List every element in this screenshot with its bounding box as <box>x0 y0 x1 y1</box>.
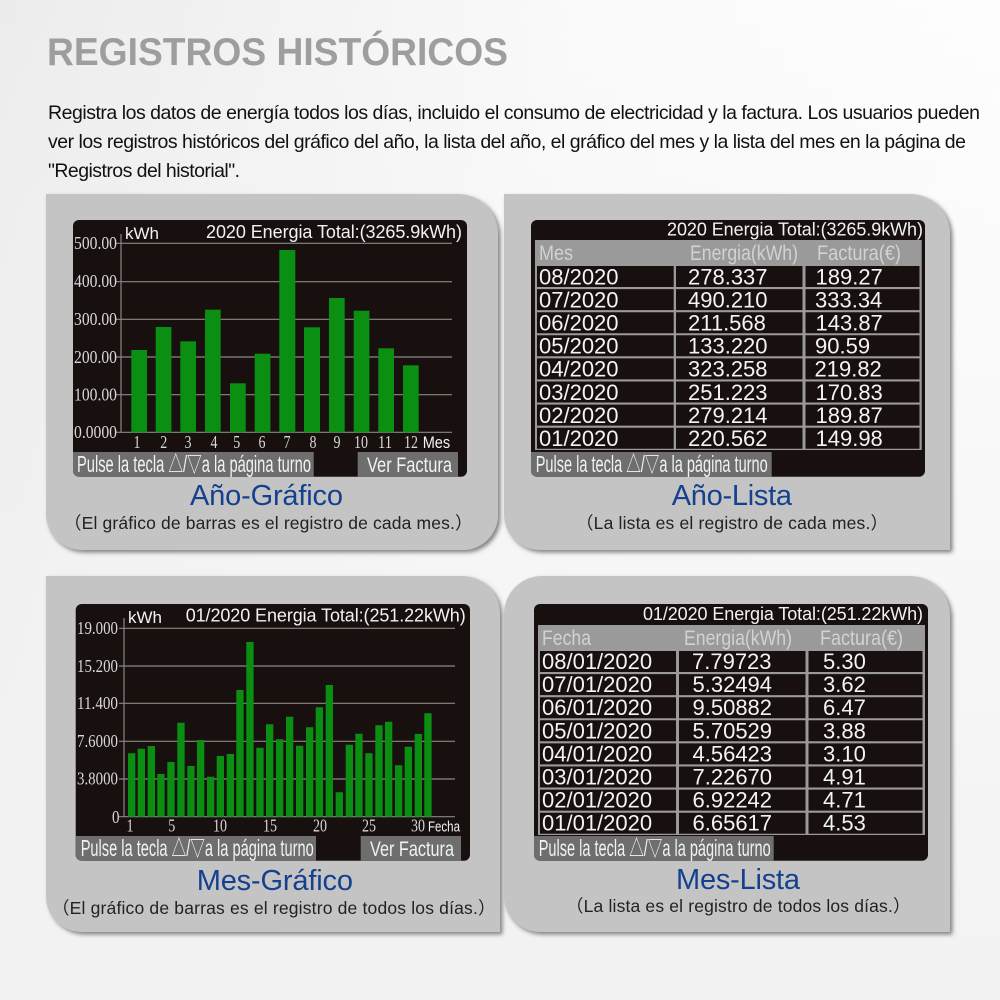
table rows: 4.53 <box>823 811 866 836</box>
intro paragraph: Registra los datos de energía todos los días, incluido el consumo de electricidad y la factura. Los usuarios pueden <box>48 102 980 124</box>
y axis labels: 400.00 <box>74 271 117 291</box>
page-turn button <box>534 835 774 861</box>
table rows: 08/01/2020 <box>542 649 652 674</box>
table rows: 143.87 <box>816 310 883 336</box>
x axis labels: 30 <box>411 816 425 836</box>
table rows: 05/2020 <box>539 334 619 359</box>
screen: year bar chart <box>73 220 467 477</box>
table rows: 5.30 <box>823 649 866 674</box>
y axis labels: 0.0000 <box>74 422 117 442</box>
table rows: 05/01/2020 <box>542 718 652 743</box>
table rows: 03/2020 <box>539 380 619 405</box>
panel caption: （La lista es el registro de todos los días.） <box>566 896 910 916</box>
x axis labels: 9 <box>334 432 340 452</box>
y axis labels: 3.8000 <box>77 769 118 789</box>
table rows: 4.56423 <box>692 741 772 766</box>
table rows <box>540 649 922 836</box>
chart title: 01/2020 Energia Total:(251.22kWh) <box>186 606 466 626</box>
x axis labels: 6 <box>258 432 266 452</box>
table rows: 7.79723 <box>692 649 772 674</box>
panel caption: （El gráfico de barras es el registro de cada mes.） <box>64 513 472 533</box>
list title: 2020 Energia Total:(3265.9kWh) <box>667 220 923 240</box>
y axis labels <box>74 233 117 442</box>
grid lines and axis <box>119 618 455 817</box>
table rows: 90.59 <box>815 334 870 359</box>
monthly bars <box>131 250 419 432</box>
x axis labels: 5 <box>168 816 175 836</box>
table rows: 278.337 <box>688 264 768 289</box>
table rows: 6.65617 <box>692 811 772 836</box>
view bill button: Ver Factura <box>370 838 454 861</box>
table rows: 4.91 <box>823 764 866 790</box>
page-turn button <box>73 451 314 477</box>
table header: Mes <box>539 242 573 265</box>
table header: Energia(kWh) <box>690 242 798 265</box>
y axis labels: 15.200 <box>77 656 118 676</box>
table rows: 04/2020 <box>539 357 619 382</box>
x axis labels: 15 <box>263 816 277 836</box>
screen: year list <box>531 220 925 477</box>
table rows: 251.223 <box>688 380 768 405</box>
table rows: 3.10 <box>823 741 866 766</box>
table rows: 323.258 <box>688 357 768 382</box>
daily bars <box>128 642 432 817</box>
table rows: 08/2020 <box>539 264 619 289</box>
page-turn button <box>531 451 772 477</box>
x axis labels: 10 <box>213 816 227 836</box>
table rows: 219.82 <box>814 357 882 382</box>
table rows: 03/01/2020 <box>542 764 652 790</box>
table header: Fecha <box>542 627 591 650</box>
list title: 01/2020 Energia Total:(251.22kWh) <box>643 604 923 624</box>
panel heading: Mes-Gráfico <box>197 865 353 897</box>
table rows: 06/2020 <box>539 310 619 336</box>
x axis labels: 12 <box>404 432 418 452</box>
panel heading: Mes-Lista <box>676 864 801 896</box>
table rows: 189.87 <box>816 403 883 428</box>
y axis labels: 19.000 <box>77 618 118 638</box>
intro paragraph: "Registros del historial". <box>48 160 240 182</box>
title: REGISTROS HISTÓRICOS <box>47 30 508 74</box>
y axis labels: 11.400 <box>77 693 118 713</box>
table rows: 490.210 <box>688 287 768 312</box>
chart title: 2020 Energia Total:(3265.9kWh) <box>206 222 462 242</box>
screen: month list <box>534 604 928 861</box>
y axis labels: 200.00 <box>74 347 117 367</box>
intro paragraph: ver los registros históricos del gráfico del año, la lista del año, el gráfico del mes y la lista del mes en la página de <box>48 131 966 153</box>
table rows: 6.92242 <box>692 788 772 813</box>
table rows: 333.34 <box>815 287 882 312</box>
table header: Factura(€) <box>817 242 901 265</box>
x axis labels: 4 <box>210 432 218 452</box>
table rows: 01/2020 <box>539 426 619 451</box>
y axis labels: 0 <box>112 807 120 827</box>
x axis labels: 25 <box>362 816 376 836</box>
page-turn button: Pulse la tecla △/▽a la página turno <box>536 451 768 477</box>
x axis labels: 11 <box>378 432 392 452</box>
table rows: 04/01/2020 <box>542 741 652 766</box>
table rows: 9.50882 <box>692 695 772 720</box>
panel heading: Año-Gráfico <box>190 480 343 512</box>
table rows: 5.32494 <box>692 672 772 697</box>
x axis labels: 2 <box>160 432 167 452</box>
table rows: 7.22670 <box>692 764 772 790</box>
table rows: 211.568 <box>688 310 766 336</box>
table frame <box>535 240 922 450</box>
panel: Mes-Lista <box>504 576 950 932</box>
x axis labels: 8 <box>310 432 316 452</box>
view bill button: Ver Factura <box>367 454 452 477</box>
unit label: kWh <box>125 224 159 243</box>
table rows: 02/2020 <box>539 403 619 428</box>
page-turn button: Pulse la tecla △/▽a la página turno <box>81 835 314 861</box>
table rows: 279.214 <box>688 403 768 428</box>
panel: Año-Gráfico <box>46 194 498 550</box>
unit label: kWh <box>128 608 162 627</box>
table rows: 01/01/2020 <box>542 811 652 836</box>
table header <box>539 242 901 265</box>
panel: Mes-Gráfico <box>46 576 500 932</box>
intro paragraph <box>48 102 980 182</box>
x axis labels: 20 <box>313 816 327 836</box>
y axis labels <box>77 618 120 827</box>
table rows: 6.47 <box>823 695 866 720</box>
page-turn button: Pulse la tecla △/▽a la página turno <box>77 451 311 477</box>
table rows: 3.88 <box>823 718 866 743</box>
x axis labels <box>126 816 425 836</box>
panel caption: （El gráfico de barras es el registro de todos los días.） <box>52 898 496 918</box>
x axis unit: Mes <box>423 433 450 452</box>
y axis labels: 300.00 <box>74 309 117 329</box>
table rows: 4.71 <box>823 788 866 813</box>
x axis labels: 1 <box>126 816 134 836</box>
panel caption: （La lista es el registro de cada mes.） <box>576 513 888 533</box>
y axis labels: 100.00 <box>74 384 117 404</box>
table rows: 06/01/2020 <box>542 695 652 720</box>
panel heading: Año-Lista <box>672 480 793 512</box>
x axis labels: 5 <box>233 432 240 452</box>
y axis labels: 500.00 <box>74 233 117 253</box>
table rows: 149.98 <box>816 426 883 451</box>
x axis labels <box>134 432 418 452</box>
table header: Factura(€) <box>820 627 903 650</box>
table rows: 170.83 <box>816 380 883 405</box>
table rows: 02/01/2020 <box>542 788 652 813</box>
y axis labels: 7.6000 <box>77 731 118 751</box>
screen: month bar chart <box>76 604 470 861</box>
table rows: 07/01/2020 <box>542 672 652 697</box>
table frame <box>538 625 925 835</box>
table rows: 133.220 <box>688 334 768 359</box>
table rows: 189.27 <box>816 264 883 289</box>
table rows: 07/2020 <box>539 287 619 312</box>
page-turn button: Pulse la tecla △/▽a la página turno <box>539 835 771 861</box>
table rows <box>537 264 920 451</box>
page-turn button <box>76 835 316 861</box>
table rows: 5.70529 <box>692 718 772 743</box>
x axis labels: 10 <box>354 432 368 452</box>
table header <box>542 627 903 650</box>
table rows: 3.62 <box>823 672 866 697</box>
x axis labels: 7 <box>284 432 290 452</box>
x axis unit: Fecha <box>428 819 460 836</box>
panel: Año-Lista <box>504 194 950 550</box>
table rows: 220.562 <box>688 426 768 451</box>
x axis labels: 1 <box>134 432 140 452</box>
table header: Energia(kWh) <box>684 627 792 650</box>
grid lines and axis <box>116 234 452 432</box>
x axis labels: 3 <box>184 432 192 452</box>
